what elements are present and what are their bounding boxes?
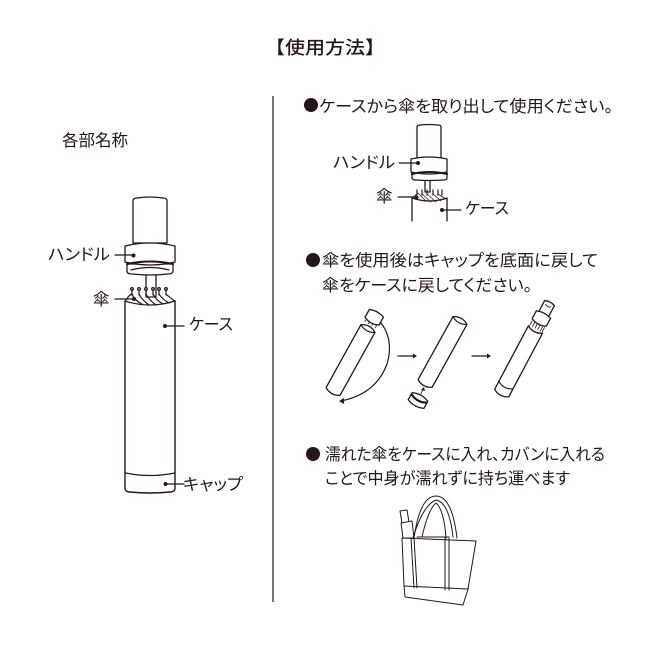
step 3 text: 濡れた傘をケースに入れ、カバンに入れる	[325, 445, 605, 464]
umbrella handle	[133, 197, 167, 243]
bag body	[402, 538, 476, 605]
assembled umbrella	[493, 298, 557, 399]
heading: part names: 各部名称	[62, 131, 128, 150]
step 1 text: ケースから傘を取り出して使用ください。	[319, 97, 613, 116]
handle collar	[125, 243, 175, 275]
umbrella without cap	[325, 322, 376, 398]
small shaft	[425, 178, 430, 192]
small collar	[411, 157, 447, 180]
umbrella ribs	[126, 288, 175, 305]
step 2 text	[306, 251, 598, 295]
umbrella case, capless	[417, 314, 468, 390]
label: umbrella	[376, 187, 418, 206]
label: handle	[48, 246, 136, 264]
label: umbrella: 傘	[93, 290, 110, 309]
diagram: step 2 sequence	[325, 298, 557, 410]
label: case: ケース	[465, 200, 509, 218]
step 3 text	[306, 445, 605, 488]
small case	[412, 198, 447, 221]
small handle	[417, 124, 441, 158]
step 2 text: 傘を使用後はキャップを底面に戻して	[322, 251, 598, 270]
bag handles	[411, 496, 457, 590]
curved arrow	[339, 323, 389, 404]
label: handle: ハンドル	[48, 246, 110, 264]
arrow	[398, 354, 417, 358]
umbrella case	[125, 301, 175, 493]
label: umbrella	[93, 290, 136, 309]
step 3 text: ことで中身が濡れずに持ち運べます	[325, 469, 570, 488]
small ribs	[413, 190, 446, 202]
label: umbrella: 傘	[376, 187, 392, 206]
diagram: umbrella parts	[48, 197, 244, 494]
arrow	[472, 354, 491, 358]
step 2 text: 傘をケースに戻してください。	[322, 276, 532, 295]
title: 【使用方法】	[265, 38, 385, 58]
label: cap	[164, 475, 244, 494]
label: cap: キャップ	[183, 475, 244, 494]
shaft	[146, 270, 156, 297]
label: case	[440, 200, 509, 218]
label: handle: ハンドル	[333, 154, 395, 172]
label: handle	[333, 154, 420, 172]
cap and up arrow	[407, 387, 429, 410]
label: case: ケース	[189, 316, 233, 334]
removed cap	[363, 308, 384, 329]
diagram: step 1 umbrella	[333, 124, 509, 221]
label: case	[163, 316, 233, 334]
icon: tote bag with umbrella	[400, 496, 476, 605]
umbrella in bag	[400, 510, 409, 523]
